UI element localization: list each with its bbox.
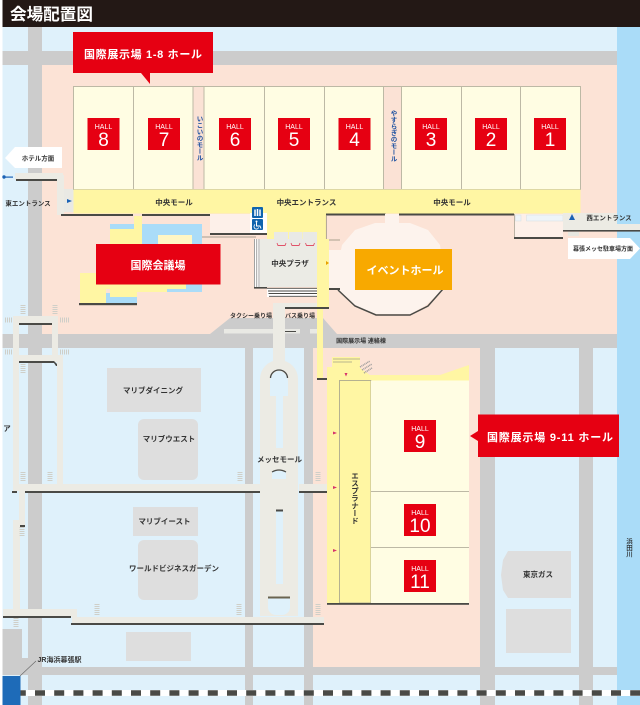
hall 6 marker: [219, 118, 251, 151]
label: east entrance: 東エントランス: [5, 198, 51, 208]
building: Tokyo Gas: [501, 551, 571, 598]
building: unnamed: [126, 632, 191, 661]
hall 5 marker: 5: [289, 130, 299, 151]
label: Hamada River: 浜田川: [624, 536, 633, 557]
connecting corridor: [285, 239, 329, 380]
callout: halls 9-11: [470, 414, 619, 457]
label: Ikoi Mall: いこいのモール: [195, 115, 203, 161]
international conference hall building: [79, 216, 202, 305]
hall 7 marker: HALL: [155, 124, 173, 131]
hall 7 marker: 7: [159, 130, 169, 151]
label: Messe Mall: メッセモール: [257, 455, 302, 464]
station marker: [2, 661, 36, 705]
building: Maribu West: [138, 419, 198, 480]
hall 4 marker: [338, 118, 370, 151]
label: event hall: [355, 249, 452, 290]
label: central mall east: 中央モール: [433, 197, 471, 207]
hall 3 marker: [415, 118, 447, 151]
crosswalks: [5, 305, 318, 627]
hall 2 marker: [475, 118, 507, 151]
building: Maribu East: [133, 507, 198, 536]
hall 1 marker: [534, 118, 566, 151]
label: international conference hall: [96, 244, 220, 284]
hall 2 marker: 2: [486, 130, 496, 151]
icon: wheelchair: [252, 219, 263, 230]
label: Yasuragi Mall: やすらぎのモール: [389, 109, 397, 162]
hall 8 marker: [88, 118, 120, 151]
building: World Business Garden: [138, 540, 198, 600]
hall 9 marker: [404, 420, 436, 453]
hall 3 marker: 3: [426, 130, 436, 151]
header bar: [2, 0, 640, 27]
hall 3 marker: HALL: [422, 124, 440, 131]
hall 5 marker: [278, 118, 310, 151]
label: Maribu Dining: マリブダイニング: [123, 385, 183, 395]
callout: halls 9-11: 国際展示場 9-11 ホール: [487, 430, 613, 444]
label: central mall west: 中央モール: [155, 197, 193, 207]
east entrance structure: [2, 173, 74, 215]
other buildings: [107, 368, 571, 661]
railway line: [20, 690, 640, 696]
hall 4 marker: HALL: [346, 124, 363, 131]
exhibition halls 9-11 building: [327, 357, 469, 605]
sign: hotel direction: ホテル方面: [22, 154, 55, 162]
restroom block: [202, 207, 267, 237]
hall 10 marker: 10: [409, 516, 431, 537]
hall 11 marker: 11: [410, 572, 430, 593]
hall 10 marker: HALL: [411, 510, 429, 517]
sign: hotel direction: [5, 147, 62, 168]
label: west entrance: 西エントランス: [586, 214, 632, 222]
icon: restroom: [252, 207, 263, 218]
label: bus stop: バス乗り場: [285, 312, 315, 320]
hall 11 marker: HALL: [411, 566, 429, 573]
hall 9 marker: HALL: [411, 426, 429, 433]
hall 1 marker: HALL: [541, 124, 559, 131]
label: Tokyo Gas: 東京ガス: [523, 569, 553, 579]
label: event hall: イベントホール: [366, 264, 444, 277]
label: Esplanade: エスプラナード: [350, 472, 360, 524]
callout: halls 1-8: [73, 32, 213, 84]
label: partial label at left edge: ア: [3, 424, 11, 433]
label: Maribu West: マリブウエスト: [143, 434, 195, 444]
hall 11 marker: [404, 560, 436, 593]
title: 会場配置図: [10, 5, 93, 24]
text labels: [3, 109, 633, 664]
hall 5 marker: HALL: [285, 124, 303, 131]
hall 9 marker: 9: [415, 432, 425, 453]
hall 6 marker: HALL: [226, 124, 244, 131]
messe mall: [260, 303, 317, 616]
label: Maribu East: マリブイースト: [138, 516, 191, 526]
hall 8 marker: HALL: [95, 124, 112, 131]
label: central plaza: 中央プラザ: [271, 258, 309, 268]
pedestrian walkways: [3, 316, 327, 625]
label: JR Kaihin-Makuhari Station: JR海浜幕張駅: [38, 655, 81, 664]
west service block and entrance: [514, 213, 640, 239]
central plaza: [254, 232, 317, 297]
label: taxi stand: タクシー乗り場: [230, 312, 272, 320]
hall 10 marker: [404, 504, 436, 537]
hall 7 marker: [148, 118, 180, 151]
building: Maribu Dining: [107, 368, 201, 412]
label: connecting building: 国際展示場 連絡棟: [336, 337, 386, 345]
hall 2 marker: HALL: [482, 124, 500, 131]
sign: parking direction: [568, 238, 640, 259]
exhibition halls 1-8 building: [74, 86, 580, 190]
building: south of Tokyo Gas: [506, 609, 571, 653]
central mall: [61, 190, 580, 240]
hall 1 marker: 1: [545, 130, 555, 151]
event hall building: [329, 214, 443, 315]
hall 4 marker: 4: [349, 130, 360, 151]
label: World Business Garden: ワールドビジネスガーデン: [129, 563, 219, 573]
sign: parking direction: 幕張メッセ駐車場方面: [573, 245, 633, 253]
hall 6 marker: 6: [230, 130, 240, 151]
callout: halls 1-8: 国際展示場 1-8 ホール: [84, 47, 202, 61]
label: international conference hall: 国際会議場: [130, 258, 186, 272]
label: central entrance: 中央エントランス: [277, 197, 336, 207]
hall 8 marker: 8: [98, 130, 109, 151]
